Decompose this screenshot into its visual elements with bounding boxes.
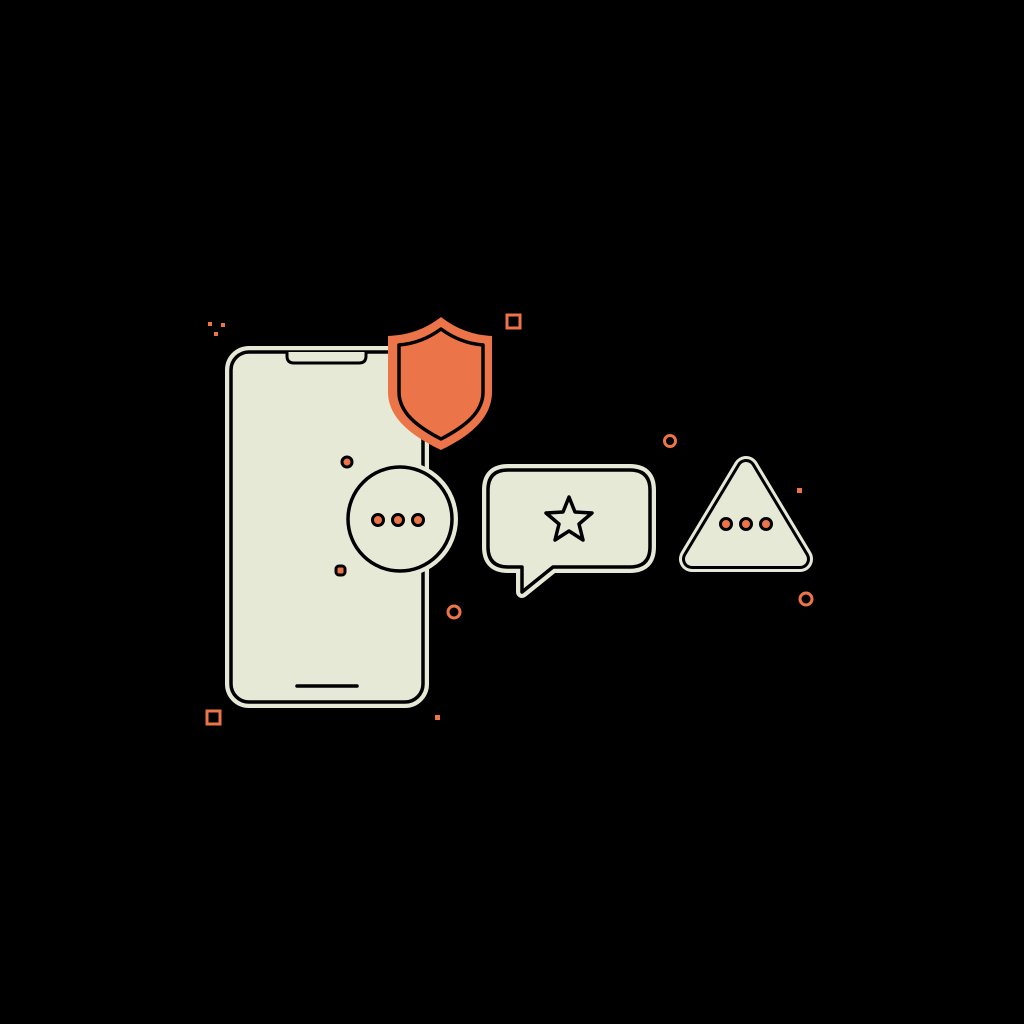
icon: speech bubble with star: [488, 470, 650, 592]
icon: shield: [388, 317, 492, 450]
star: [546, 497, 592, 540]
phone notch: [287, 352, 366, 363]
decorative accents: [207, 315, 812, 724]
phone home bar: [297, 684, 357, 688]
small dots on phone: [336, 457, 352, 575]
icon: warning triangle: [692, 469, 800, 559]
icon: smartphone: [231, 352, 423, 702]
icon: typing chat circle: [348, 467, 452, 571]
